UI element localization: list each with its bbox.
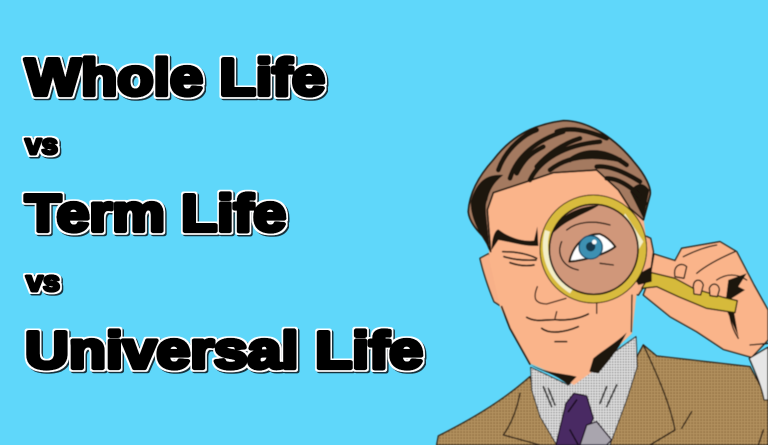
magnified eyebrow <box>551 205 599 235</box>
suit jacket <box>437 345 768 445</box>
text: vs (first): vs <box>25 129 58 161</box>
handle <box>642 273 737 313</box>
shirt collar <box>531 337 637 445</box>
magnifying glass <box>540 195 737 313</box>
left ear <box>480 253 503 307</box>
jaw outline and shadow <box>502 295 632 385</box>
lens <box>549 204 638 294</box>
rim <box>540 195 647 303</box>
magnified eye <box>560 222 615 270</box>
heading: Whole Life: Whole Life <box>25 49 325 107</box>
mouth <box>527 314 588 342</box>
winking eye lines <box>503 252 537 266</box>
nose <box>535 287 597 318</box>
necktie <box>556 393 612 445</box>
heading: Universal Life: Universal Life <box>25 322 423 380</box>
right ear <box>630 235 653 295</box>
fingers over handle <box>675 264 719 297</box>
face <box>487 170 647 385</box>
text: vs (second): vs <box>26 266 60 298</box>
left eyebrow <box>492 227 538 250</box>
hair <box>468 121 650 252</box>
illustration: man with magnifying glass <box>437 121 768 445</box>
hand <box>643 242 768 357</box>
heading: Term Life: Term Life <box>25 185 286 243</box>
shirt cuff <box>749 347 768 400</box>
